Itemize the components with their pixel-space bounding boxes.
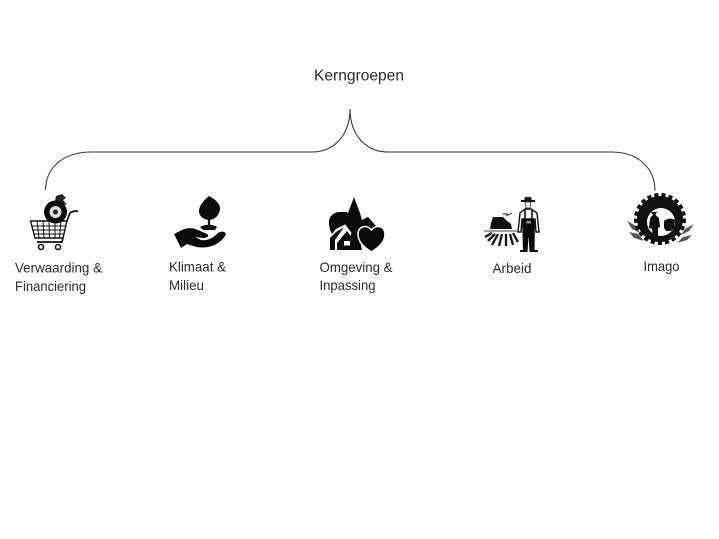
label: Imago: Imago	[644, 258, 680, 274]
curly brace connector	[46, 109, 655, 191]
label: Verwaarding & Financiering	[15, 260, 103, 294]
label: Arbeid: Arbeid	[492, 260, 532, 276]
label: Verwaarding & Financiering: Verwaarding &	[15, 260, 103, 276]
label: Klimaat & Milieu	[169, 258, 227, 293]
icon: farmer with tractor and field	[484, 197, 539, 252]
label: Verwaarding & Financiering: Financiering	[15, 278, 86, 294]
label: Omgeving & Inpassing: Omgeving &	[320, 259, 393, 275]
icon: hand holding plant	[174, 196, 226, 248]
label: Klimaat & Milieu: Klimaat &	[169, 258, 227, 274]
label: Omgeving & Inpassing: Inpassing	[320, 277, 376, 293]
icon: shopping cart with money bag	[30, 194, 78, 250]
title: Kerngroepen	[314, 68, 404, 84]
label: Klimaat & Milieu: Milieu	[169, 277, 204, 293]
icon: village with church and heart	[329, 197, 385, 252]
icon: imago badge with gear	[627, 196, 694, 243]
label: Omgeving & Inpassing	[320, 259, 393, 293]
